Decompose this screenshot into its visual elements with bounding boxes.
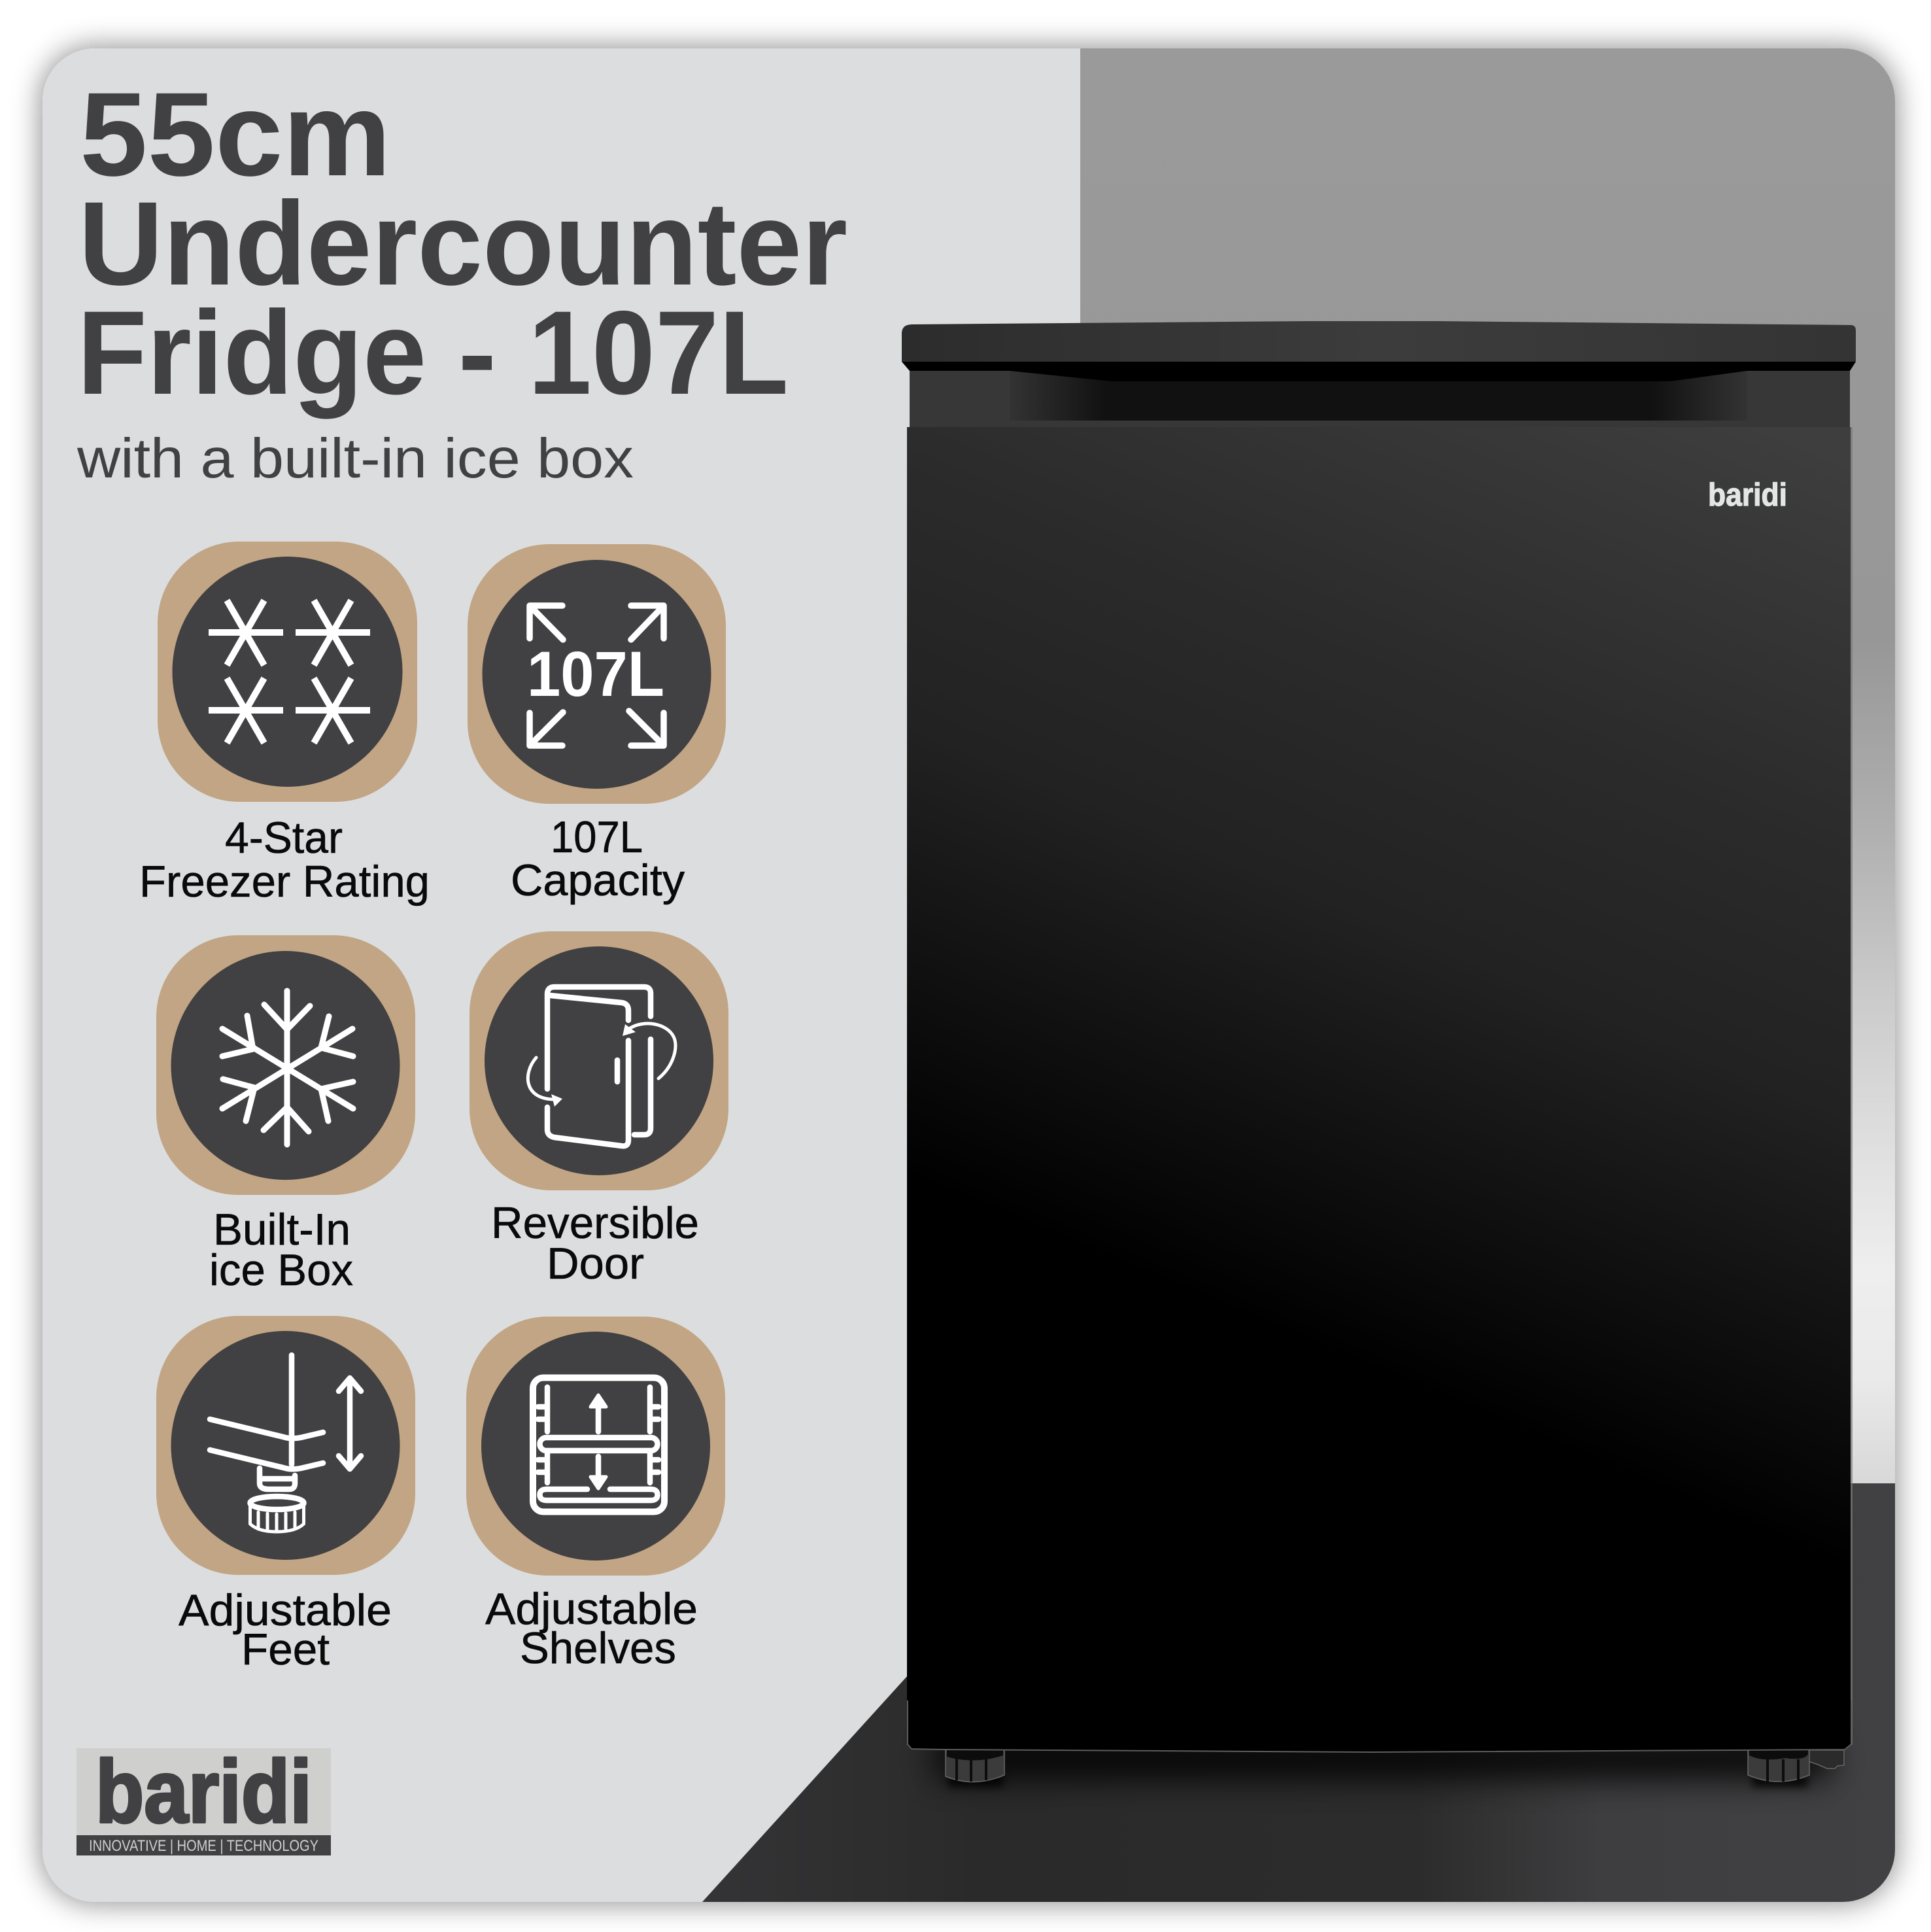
badge circle	[173, 557, 403, 787]
label: capacity: Capacity	[511, 855, 685, 905]
top cap	[902, 321, 1856, 362]
logo plate	[77, 1748, 331, 1835]
door edge highlight	[1850, 427, 1853, 1745]
badge	[468, 544, 726, 804]
floor shadow	[935, 1736, 1831, 1779]
badge	[470, 931, 728, 1190]
tagline: INNOVATIVE | HOME | TECHNOLOGY	[89, 1837, 318, 1855]
logo: baridi	[77, 1742, 331, 1855]
label: feet: Feet	[241, 1625, 330, 1674]
title: Undercounter	[78, 177, 847, 310]
label: 4-Star	[225, 813, 343, 863]
title: 55cm	[80, 67, 391, 201]
icon: expand arrows	[530, 606, 664, 746]
badge	[158, 542, 417, 802]
feature: built-in ice box	[156, 935, 415, 1254]
icon: shelves	[533, 1377, 664, 1512]
icon: foot	[210, 1355, 361, 1532]
label: freezer rating: Freezer Rating	[139, 857, 430, 906]
badge circle	[171, 1331, 400, 1560]
label: Adjustable	[485, 1584, 698, 1634]
badge	[156, 935, 415, 1195]
fridge logo: baridi	[1708, 477, 1787, 513]
badge circle	[481, 1332, 710, 1561]
black gap under top cap	[902, 362, 1856, 381]
feature: 4-star freezer rating	[158, 542, 417, 863]
feature: adjustable shelves	[466, 1317, 725, 1634]
label: Adjustable	[179, 1585, 392, 1635]
feature: reversible door	[470, 931, 728, 1248]
door panel	[907, 427, 1851, 1752]
handle recess	[1010, 368, 1747, 421]
icon: four stars	[209, 600, 370, 743]
floor	[702, 1483, 1895, 1902]
badge	[466, 1317, 725, 1576]
icon: door	[528, 987, 675, 1146]
label: shelves: Shelves	[520, 1623, 676, 1673]
right foot shadow	[1752, 1774, 1807, 1787]
label: Reversible	[491, 1198, 699, 1248]
feature: adjustable feet	[156, 1316, 415, 1635]
wall backdrop	[1080, 48, 1895, 1483]
tagline band	[77, 1835, 331, 1855]
fridge	[902, 321, 1856, 1782]
icon: snowflake	[222, 991, 353, 1145]
logo wordmark: baridi	[95, 1742, 312, 1841]
title: Fridge - 107L	[77, 286, 789, 419]
badge	[156, 1316, 415, 1575]
feature: 107L capacity	[468, 544, 726, 862]
subtitle: with a built-in ice box	[77, 428, 634, 490]
label: ice box: ice Box	[209, 1245, 353, 1295]
badge circle	[171, 951, 400, 1180]
label: 107L	[551, 812, 643, 862]
label: Built-In	[213, 1205, 350, 1254]
icon text: 107L	[527, 638, 664, 710]
badge circle	[485, 946, 713, 1175]
title	[77, 67, 847, 419]
left foot	[946, 1750, 1004, 1782]
door hinge	[1805, 1750, 1844, 1768]
right foot	[1748, 1750, 1809, 1782]
badge circle	[483, 560, 711, 789]
label: door: Door	[547, 1239, 644, 1288]
neck	[910, 360, 1850, 428]
bottom trim	[908, 1700, 1851, 1752]
left foot shadow	[948, 1774, 1003, 1787]
